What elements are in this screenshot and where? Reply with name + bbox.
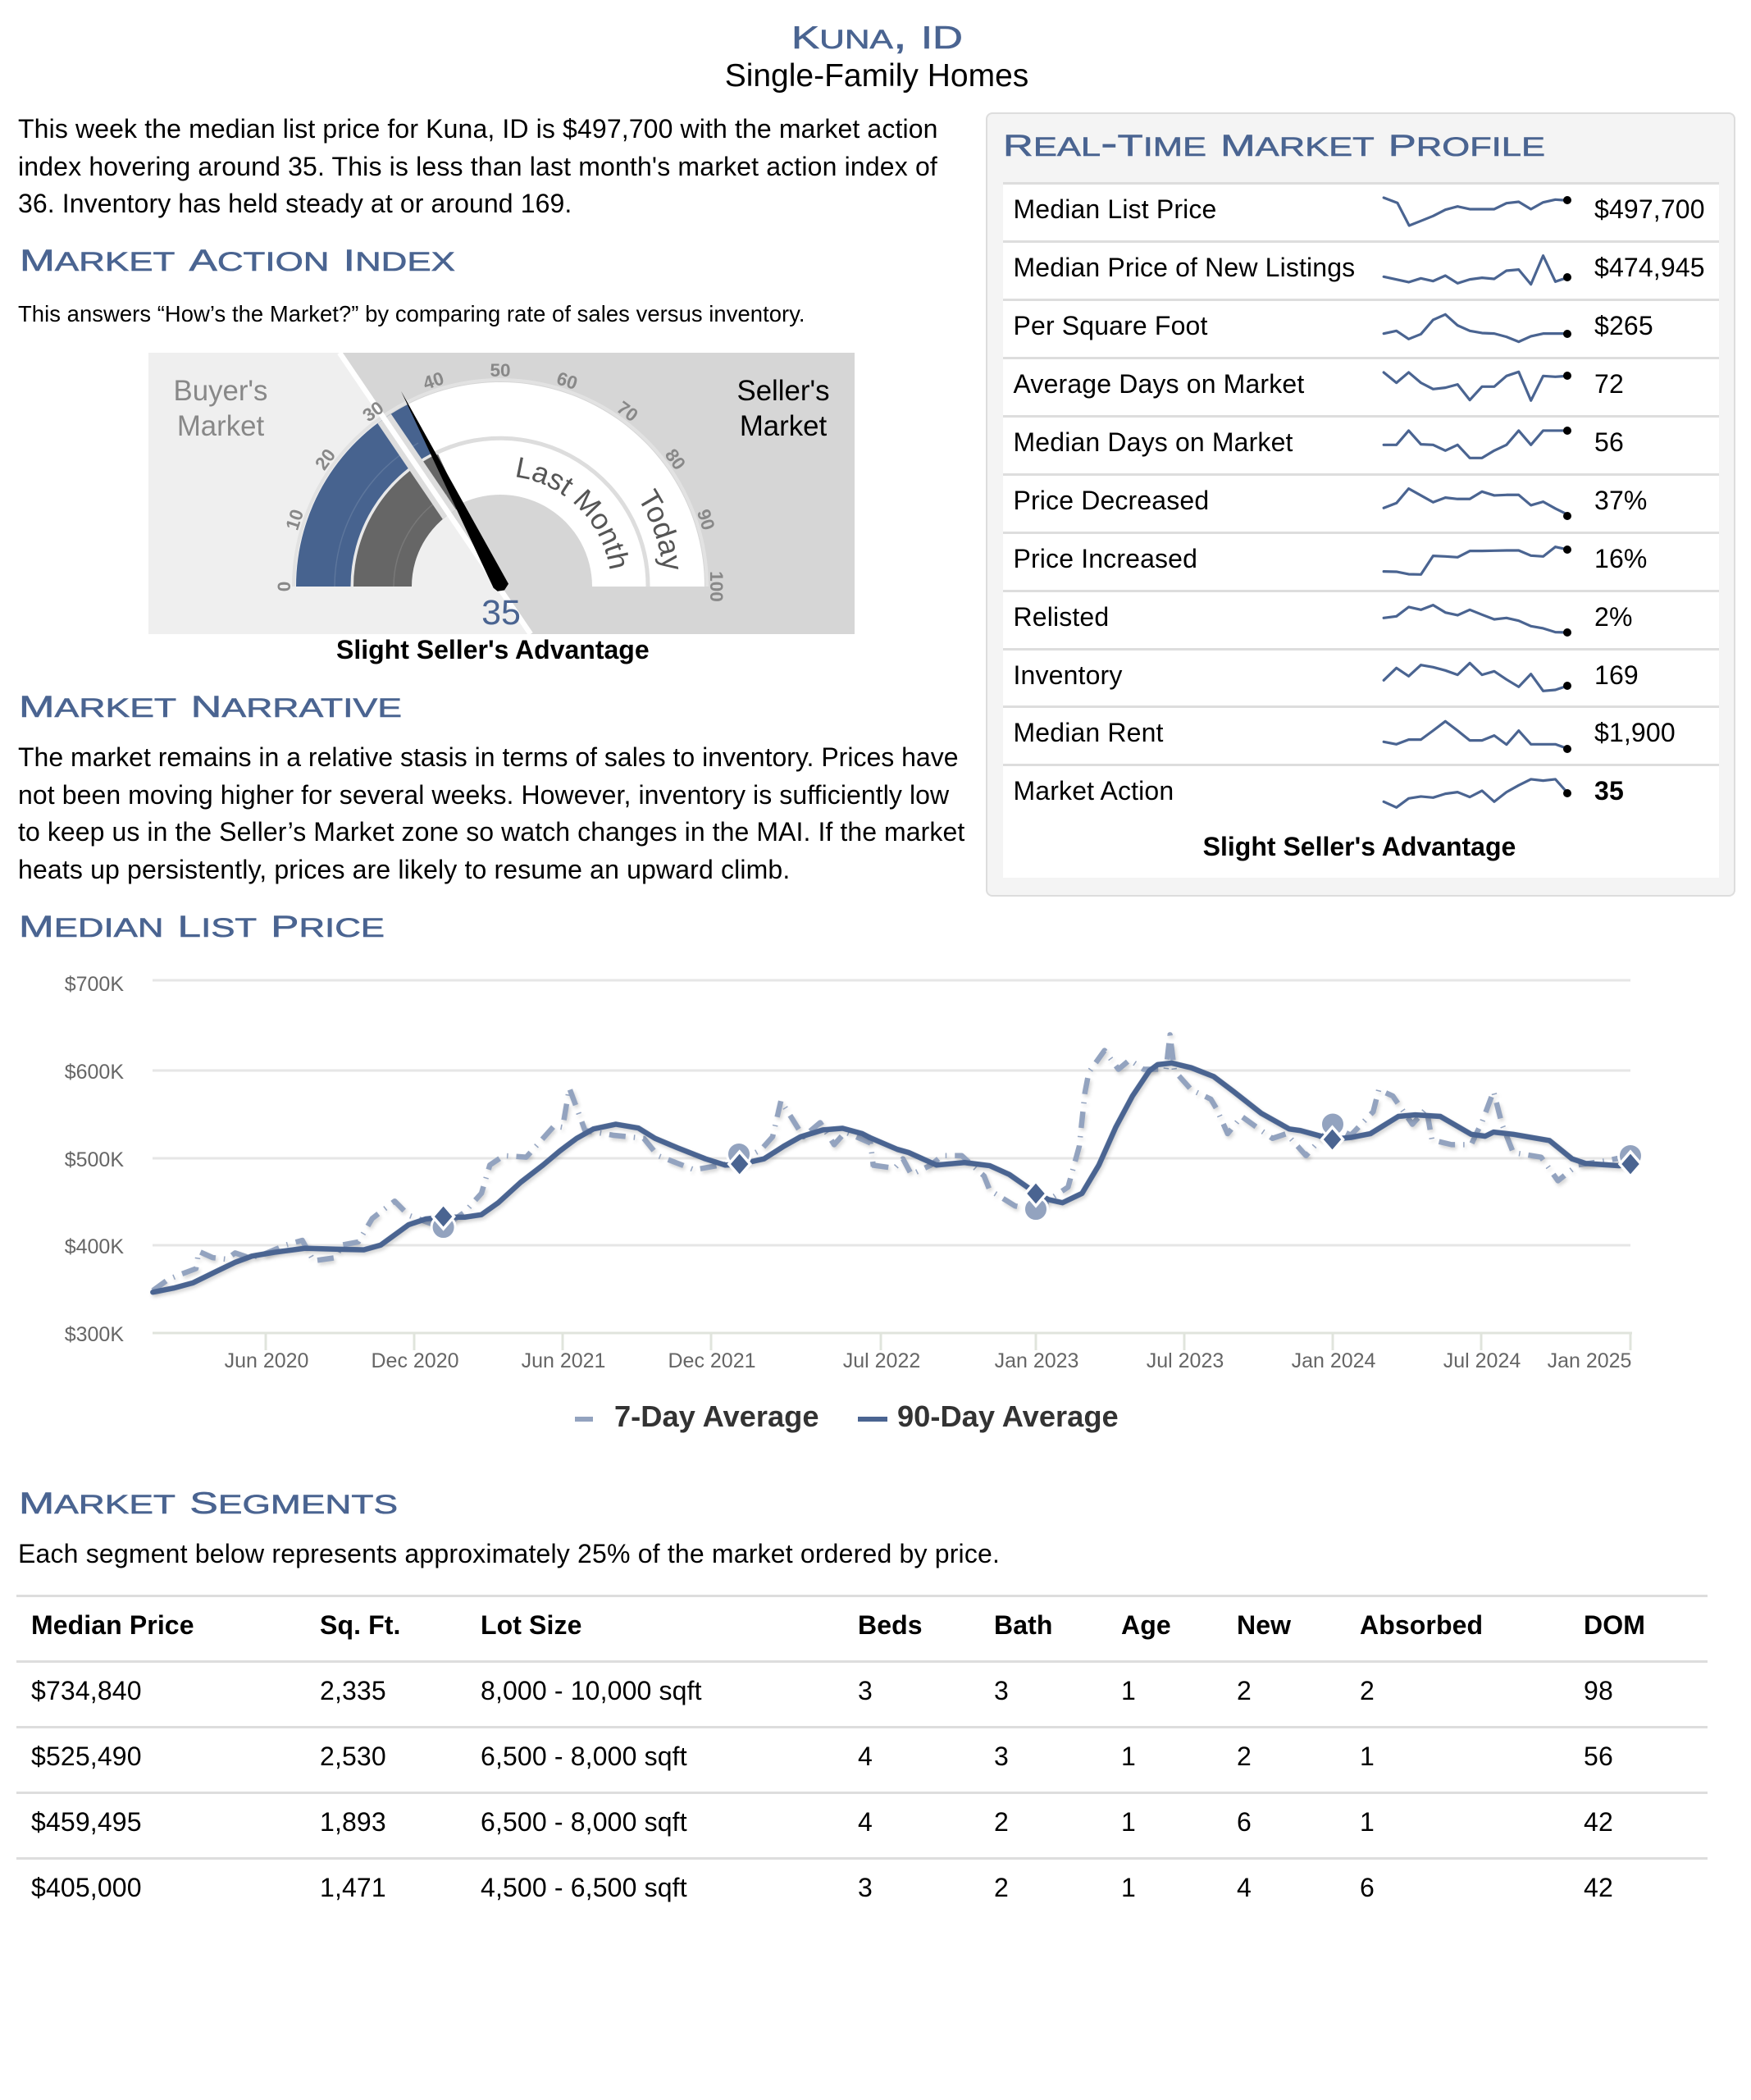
- row: average days on market: 72: [1594, 369, 1624, 399]
- table: market segments: DOM: [1584, 1610, 1645, 1640]
- table: market segments: 4: [858, 1807, 873, 1837]
- y axis labels: $300K: [65, 1323, 124, 1346]
- gauge caption: Slight Seller's Advantage: [336, 635, 650, 664]
- sparkline: price increased: [1383, 546, 1571, 576]
- table: market segments: 2: [1237, 1676, 1252, 1705]
- row: inventory: 169: [1594, 660, 1639, 690]
- table: market segments: $459,495: [31, 1807, 142, 1837]
- row: market action: Market Action: [1014, 776, 1174, 806]
- sparkline: median days on market: [1383, 427, 1571, 459]
- gauge tick labels: 40: [421, 368, 446, 394]
- x axis labels: Jan 2023: [995, 1349, 1078, 1372]
- today band: remainder: [408, 382, 705, 587]
- needle: [401, 391, 508, 591]
- table: market segments: $525,490: [31, 1742, 142, 1771]
- sparkline: median list price: [1383, 196, 1571, 227]
- row: relisted: [1003, 590, 1719, 648]
- heading: market action index: M arket Action Index: [20, 237, 455, 279]
- x axis labels: Jun 2020: [225, 1349, 308, 1372]
- row: inventory: [1003, 648, 1719, 706]
- table: market segments: 1: [1360, 1742, 1375, 1771]
- x axis labels: Jul 2022: [843, 1349, 920, 1372]
- row: median rent: Median Rent: [1014, 718, 1164, 747]
- table: market segments: 4: [1237, 1873, 1252, 1902]
- series: 7-day average: [153, 1034, 1630, 1290]
- table: market segments: 1: [1360, 1807, 1375, 1837]
- gauge chart: [148, 353, 855, 634]
- x axis labels: Jul 2024: [1443, 1349, 1521, 1372]
- row: price decreased: [1003, 473, 1719, 532]
- heading: market segments: M arket Segments: [19, 1480, 398, 1522]
- row: average days on market: Average Days on Market: [1014, 369, 1304, 399]
- gauge tick labels: 90: [693, 507, 718, 532]
- row: relisted: 2%: [1594, 602, 1633, 632]
- sparkline: per square foot: [1383, 313, 1571, 343]
- table: market segments: Absorbed: [1360, 1610, 1483, 1640]
- table: market segments: Lot Size: [481, 1610, 581, 1640]
- faint inner band arcs: [335, 443, 447, 587]
- table: market segments: 6,500 - 8,000 sqft: [481, 1807, 687, 1837]
- row: price increased: [1003, 532, 1719, 590]
- table: market segments: 98: [1584, 1676, 1613, 1705]
- sparkline: inventory: [1383, 661, 1571, 692]
- table: market segments: 6,500 - 8,000 sqft: [481, 1742, 687, 1771]
- market narrative text: heats up persistently, prices are likely to resume an upward climb.: [18, 855, 790, 884]
- gauge outer halo: [294, 380, 707, 587]
- table: market segments: 6: [1237, 1807, 1252, 1837]
- table: market segments: 1: [1121, 1873, 1136, 1902]
- table: market segments: Beds: [858, 1610, 923, 1640]
- panel heading: Real- Time M arket Profile: [1003, 122, 1545, 164]
- table: market segments: New: [1237, 1610, 1291, 1640]
- band label: last month: Last Month: [517, 457, 628, 569]
- x axis labels: Jul 2023: [1147, 1349, 1224, 1372]
- row: average days on market: [1003, 357, 1719, 415]
- row: price decreased: Price Decreased: [1014, 486, 1209, 515]
- table: market segments: Age: [1121, 1610, 1171, 1640]
- gauge tick labels: [274, 360, 727, 602]
- markers: 7-day circles: [431, 1112, 1642, 1239]
- sparkline: new listings: [1383, 254, 1571, 285]
- panel background: [986, 112, 1735, 897]
- legend: 7-Day Average: [614, 1399, 819, 1433]
- intro text block: [18, 114, 938, 218]
- row: median price of new listings: Median Price of New Listings: [1014, 253, 1355, 282]
- x axis: [153, 1333, 1632, 1350]
- seller's market label: Market: [740, 410, 827, 442]
- sparkline: relisted: [1383, 604, 1571, 637]
- x axis labels: Dec 2021: [668, 1349, 756, 1372]
- gauge tick labels: 60: [554, 368, 580, 394]
- x axis labels: Dec 2020: [371, 1349, 459, 1372]
- table: market segments: [16, 1595, 1708, 1902]
- table: market segments: 1: [1121, 1807, 1136, 1837]
- market narrative text: The market remains in a relative stasis in terms of sales to inventory. Prices have: [18, 742, 959, 772]
- table: market segments: 2,530: [320, 1742, 386, 1771]
- row: median days on market: [1003, 415, 1719, 473]
- table: market segments: 2: [994, 1807, 1009, 1837]
- row: median rent: $1,900: [1594, 718, 1676, 747]
- table: market segments: 2: [994, 1873, 1009, 1902]
- row: median list price: $497,700: [1594, 194, 1705, 224]
- gauge tick labels: 20: [311, 445, 340, 473]
- heading: median list price: M edian List Price: [19, 903, 385, 945]
- band label: today: Today: [641, 487, 679, 569]
- gauge tick labels: 0: [274, 582, 294, 591]
- row: price increased: 16%: [1594, 544, 1647, 573]
- table: market segments: 42: [1584, 1873, 1613, 1902]
- band separator right: [435, 438, 648, 587]
- markers: 90-day diamonds: [433, 1127, 1641, 1229]
- market narrative text: [18, 742, 964, 884]
- row: per square foot: $265: [1594, 311, 1653, 340]
- panel: real-time market profile: [986, 112, 1735, 897]
- market narrative text: not been moving higher for several weeks. However, inventory is sufficiently low: [18, 780, 949, 810]
- panel caption: Slight Seller's Advantage: [1203, 832, 1516, 861]
- table: market segments: 4: [858, 1742, 873, 1771]
- row: relisted: Relisted: [1014, 602, 1109, 632]
- row: market action: 35: [1594, 776, 1624, 806]
- gauge tick labels: 10: [282, 507, 308, 532]
- table: market segments: 2,335: [320, 1676, 386, 1705]
- title: Kuna, ID: [791, 14, 963, 57]
- row: median price of new listings: $474,945: [1594, 253, 1705, 282]
- row: median list price: [1003, 182, 1719, 240]
- buyer's market label: Market: [177, 410, 264, 442]
- x axis labels: Jun 2021: [522, 1349, 605, 1372]
- table: market segments: 56: [1584, 1742, 1613, 1771]
- line chart: median list price: [65, 973, 1641, 1433]
- market action index description: This answers “How’s the Market?” by comparing rate of sales versus inventory.: [18, 301, 805, 326]
- intro text block: This week the median list price for Kuna, ID is $497,700 with the market action: [18, 114, 938, 144]
- table: market segments: Bath: [994, 1610, 1053, 1640]
- row: median price of new listings: [1003, 240, 1719, 299]
- sparkline: market action: [1383, 778, 1571, 809]
- gauge tick labels: 30: [359, 397, 387, 426]
- row: median days on market: Median Days on Market: [1014, 427, 1293, 457]
- row: market action: [1003, 764, 1719, 822]
- heading: market narrative: M arket Narrative: [19, 683, 402, 725]
- row: inventory: Inventory: [1014, 660, 1122, 690]
- table: market segments: 2: [1360, 1676, 1375, 1705]
- table: market segments: $734,840: [31, 1676, 142, 1705]
- y axis labels: $600K: [65, 1061, 124, 1084]
- sparkline: average days on market: [1383, 371, 1571, 402]
- table: market segments: $405,000: [31, 1873, 142, 1902]
- table: market segments: 1: [1121, 1742, 1136, 1771]
- y axis labels: $500K: [65, 1148, 124, 1171]
- y axis labels: $400K: [65, 1235, 124, 1258]
- market narrative text: to keep us in the Seller’s Market zone so watch changes in the MAI. If the market: [18, 817, 964, 847]
- last month band: filled value: [353, 454, 463, 587]
- table: market segments: Sq. Ft.: [320, 1610, 400, 1640]
- x axis labels: [225, 1349, 1631, 1372]
- subtitle: Single-Family Homes: [725, 58, 1028, 94]
- today band: filled value: [296, 404, 433, 587]
- seller's market label: Seller's: [736, 375, 830, 407]
- table: market segments: 3: [994, 1676, 1009, 1705]
- row: median list price: Median List Price: [1014, 194, 1217, 224]
- market segments description: Each segment below represents approximately 25% of the market ordered by price.: [18, 1539, 1000, 1568]
- y axis labels: $700K: [65, 973, 124, 996]
- table: market segments: 4,500 - 6,500 sqft: [481, 1873, 687, 1902]
- gauge tick labels: 100: [706, 571, 727, 602]
- table: market segments: 3: [994, 1742, 1009, 1771]
- legend: [575, 1399, 1119, 1433]
- intro text block: index hovering around 35. This is less than last month's market action index of: [18, 152, 937, 181]
- series: 90-day average: [153, 1063, 1630, 1292]
- zone divider: [340, 353, 531, 634]
- table: market segments: 42: [1584, 1807, 1613, 1837]
- last month band: remainder: [438, 440, 647, 587]
- table: market segments: 1,893: [320, 1807, 386, 1837]
- y axis labels: [65, 973, 124, 1346]
- table: market segments: 8,000 - 10,000 sqft: [481, 1676, 702, 1705]
- gauge tick labels: 80: [661, 445, 690, 473]
- table: market segments: 2: [1237, 1742, 1252, 1771]
- sparkline: median rent: [1383, 720, 1571, 753]
- table: market segments: 3: [858, 1676, 873, 1705]
- table: market segments: 1: [1121, 1676, 1136, 1705]
- gauge tick labels: 70: [613, 397, 641, 426]
- grid lines: [153, 980, 1630, 1245]
- row: per square foot: Per Square Foot: [1014, 311, 1208, 340]
- row: price decreased: 37%: [1594, 486, 1647, 515]
- buyer's market label: Buyer's: [174, 375, 267, 407]
- x axis labels: Jan 2024: [1292, 1349, 1376, 1372]
- panel white inner area: [1003, 182, 1719, 878]
- gauge tick labels: 50: [490, 360, 511, 381]
- legend: 90-Day Average: [897, 1399, 1119, 1433]
- table: market segments: 1,471: [320, 1873, 386, 1902]
- seller zone background: [340, 353, 855, 634]
- row: price increased: Price Increased: [1014, 544, 1197, 573]
- sparkline: price decreased: [1383, 487, 1571, 520]
- x axis labels: Jan 2025: [1548, 1349, 1631, 1372]
- row: per square foot: [1003, 299, 1719, 357]
- table: market segments: Median Price: [31, 1610, 194, 1640]
- row: median days on market: 56: [1594, 427, 1624, 457]
- buyer zone background: [148, 353, 855, 634]
- zone divider shadow: [377, 413, 456, 519]
- table: market segments: 6: [1360, 1873, 1375, 1902]
- intro text block: 36. Inventory has held steady at or around 169.: [18, 189, 572, 218]
- band separator: [352, 454, 432, 587]
- table: market segments: 3: [858, 1873, 873, 1902]
- gauge value: 35: [481, 593, 521, 632]
- row: median rent: [1003, 705, 1719, 764]
